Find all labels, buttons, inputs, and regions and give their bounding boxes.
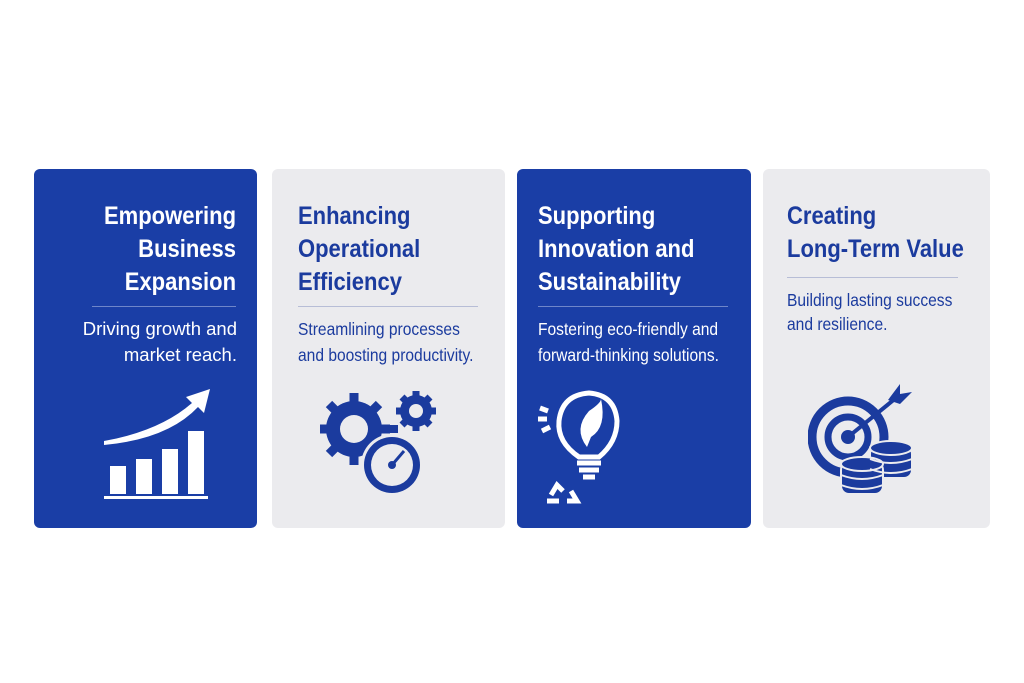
heading: [538, 202, 694, 296]
heading: Enhancing: [298, 202, 410, 230]
heading: Innovation and: [538, 235, 694, 263]
heading: Creating: [787, 202, 876, 230]
panel: innovation and sustainability: [517, 169, 751, 528]
heading: [298, 202, 420, 296]
text block: [538, 319, 719, 365]
text block: [83, 318, 237, 365]
heading: Long-Term Value: [787, 235, 964, 263]
text block: [787, 290, 952, 334]
text block: Streamlining processes: [298, 319, 460, 339]
text block: Building lasting success: [787, 290, 952, 310]
icon: gears and stopwatch: [320, 391, 436, 493]
heading: [787, 202, 964, 263]
text block: Fostering eco-friendly and: [538, 319, 718, 339]
panel: long-term value: [763, 169, 990, 528]
heading: Empowering: [104, 202, 236, 230]
icon: lightbulb with leaf and recycle: [538, 390, 620, 504]
text block: [298, 319, 473, 365]
panel: business expansion: [34, 169, 257, 528]
heading: Efficiency: [298, 268, 402, 296]
heading: Expansion: [125, 268, 236, 296]
panel: operational efficiency: [272, 169, 505, 528]
text block: and boosting productivity.: [298, 345, 473, 365]
heading: Supporting: [538, 202, 655, 230]
text block: forward-thinking solutions.: [538, 345, 719, 365]
heading: [104, 202, 236, 296]
text block: market reach.: [124, 344, 237, 365]
heading: Business: [138, 235, 236, 263]
text block: Driving growth and: [83, 318, 237, 339]
icon: growth chart: [104, 389, 210, 499]
heading: Sustainability: [538, 268, 681, 296]
text block: and resilience.: [787, 314, 887, 334]
heading: Operational: [298, 235, 420, 263]
icon: target and coins: [808, 384, 912, 493]
